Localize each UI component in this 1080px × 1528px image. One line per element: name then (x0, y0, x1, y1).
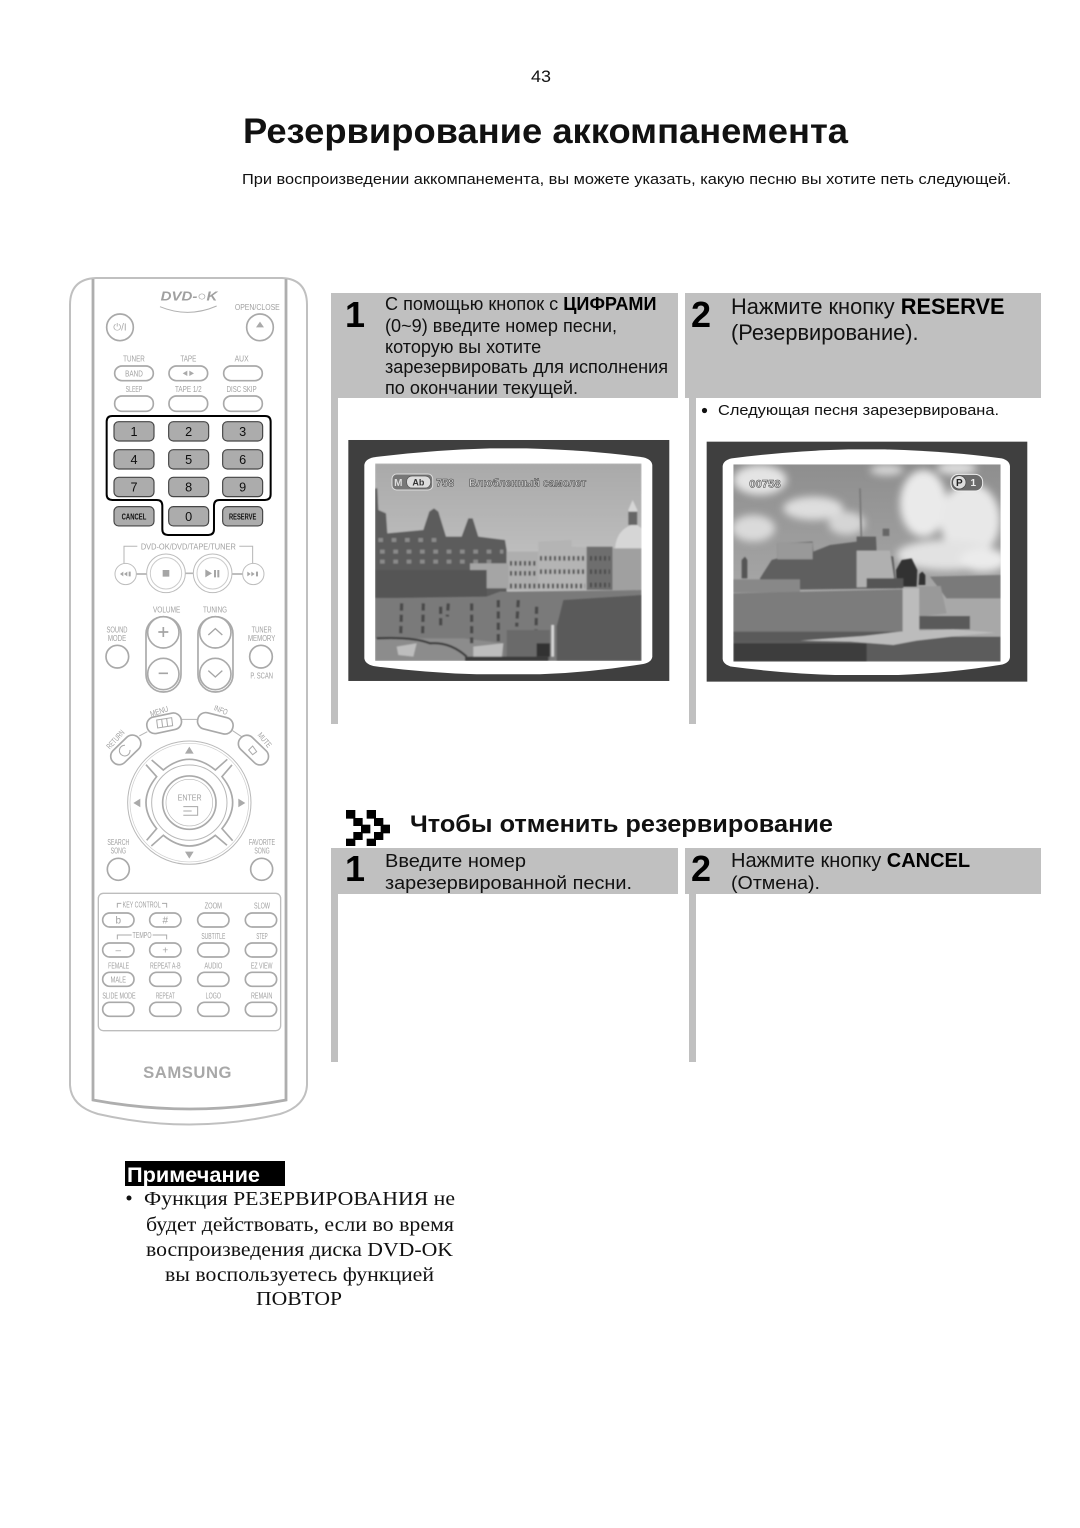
number keys highlighted: 3 (239, 425, 246, 439)
function button panel: REMAIN (251, 992, 272, 1001)
panel: step 1 (331, 293, 678, 724)
tuner memory button: TUNER (252, 626, 272, 635)
step 1 text: которую вы хотите (385, 337, 541, 357)
cancel step 2 text: Нажмите кнопку CANCEL (731, 850, 970, 872)
search song button: SONG (111, 846, 126, 855)
function button panel: SLOW (254, 902, 270, 911)
note text (126, 1188, 455, 1310)
source buttons: TAPE 1/2 (175, 385, 202, 394)
step 1 text: зарезервировать для исполнения (385, 357, 668, 377)
note block (125, 1161, 455, 1310)
number keys highlighted: 4 (130, 453, 138, 467)
on-screen display song title: Ab (412, 478, 425, 488)
open close button (235, 303, 280, 341)
samsung logo: SAMSUNG (143, 1063, 231, 1082)
cancel button: CANCEL (122, 512, 146, 521)
tuner memory button (248, 626, 276, 681)
menu cluster: INFO (213, 703, 229, 717)
function button panel: b (116, 915, 122, 926)
menu cluster: MENU (149, 704, 170, 719)
panel: step 2 (685, 293, 1041, 724)
cancel button (114, 507, 154, 526)
step 2 screen (707, 442, 1027, 682)
step 2 text: (Резервирование). (731, 320, 919, 345)
function button panel: REPEAT (156, 992, 175, 1001)
cancel step 1 number: 1 (345, 848, 365, 889)
reserve button: RESERVE (229, 512, 257, 521)
remote middle section (105, 554, 276, 880)
number keys highlighted: 8 (185, 481, 192, 495)
sound mode button (106, 626, 129, 668)
note text: ПОВТОР (256, 1288, 342, 1310)
function button panel: FEMALE (108, 962, 129, 971)
transport group label: DVD-OK/DVD/TAPE/TUNER (141, 542, 236, 551)
on-screen display counter: 00758 (749, 478, 781, 490)
note text: Функция РЕЗЕРВИРОВАНИЯ не (144, 1188, 455, 1210)
function button panel: + (162, 945, 168, 956)
number keys highlighted: 2 (185, 425, 192, 439)
function button panel: KEY CONTROL (123, 901, 161, 910)
step 2 number: 2 (691, 294, 711, 335)
source buttons (115, 354, 262, 411)
cancel step 2 number: 2 (691, 848, 711, 889)
on-screen display song title: 758 (436, 477, 454, 489)
step 2 text (731, 294, 1005, 345)
power button (107, 314, 133, 341)
source buttons: BAND (125, 369, 143, 378)
reserve button (223, 507, 263, 526)
panel: cancel step 2 (685, 848, 1041, 1062)
on-screen display counter: 1 (971, 478, 977, 489)
section heading: cancel reservation (346, 810, 833, 846)
function button panel: STEP (256, 932, 268, 941)
function button panel: ZOOM (205, 902, 222, 911)
favorite song button: SONG (254, 846, 270, 855)
page number: 43 (531, 68, 551, 86)
source buttons: SLEEP (126, 385, 142, 394)
function button panel (98, 893, 281, 1031)
function button panel: – (116, 945, 122, 956)
DVD-OK logo: DVD-○K (161, 289, 219, 304)
function button panel: # (163, 915, 169, 926)
menu cluster: RETURN (105, 728, 127, 751)
number keys highlighted: 0 (185, 510, 192, 524)
open close button: OPEN/CLOSE (235, 303, 280, 312)
menu cluster: MUTE (256, 731, 273, 749)
cancel step 1 text (385, 851, 632, 893)
function button panel: AUDIO (204, 962, 222, 971)
function button panel: MALE (111, 975, 126, 984)
step 1 text (385, 294, 668, 398)
sound mode button: SOUND (106, 626, 128, 635)
transport group label (124, 542, 253, 563)
function button panel: SLIDE MODE (102, 992, 136, 1001)
on-screen display song title (392, 474, 587, 490)
note text: будет действовать, если во время (146, 1214, 454, 1236)
step 1 text: (0~9) введите номер песни, (385, 316, 617, 336)
on-screen display counter: P (956, 478, 963, 489)
cancel step 2 background (685, 848, 1041, 1062)
highlight frame around number keys (107, 416, 271, 535)
power button: ⏻/I (113, 323, 127, 334)
page (69, 70, 1041, 1305)
function button panel: REPEAT A-B (150, 962, 181, 971)
note text: вы воспользуетесь функцией (165, 1264, 434, 1286)
title: Резервирование аккомпанемента (243, 111, 848, 151)
function button panel: LOGO (206, 992, 221, 1001)
source buttons: TUNER (123, 354, 145, 363)
cancel step 1 background (331, 848, 678, 1062)
remote upper section (107, 289, 280, 563)
step 1 background (331, 293, 678, 724)
step 1 number: 1 (345, 294, 365, 335)
cancel step 1 text: Введите номер (385, 851, 526, 871)
number keys highlighted: 7 (130, 481, 138, 495)
panel: cancel step 1 (331, 848, 678, 1062)
number keys highlighted: 1 (130, 425, 138, 439)
function button panel: SUBTITLE (201, 932, 225, 941)
on-screen display counter (749, 474, 983, 491)
intro text: При воспроизведении аккомпанемента, вы можете указать, какую песню вы хотите петь следующей. (242, 172, 1011, 188)
number keys highlighted (114, 422, 263, 526)
menu cluster (105, 703, 273, 768)
enter label: ENTER (178, 793, 202, 803)
photo: harbour skyline (375, 463, 642, 661)
search song button: SEARCH (107, 838, 129, 847)
source buttons: DISC SKIP (227, 385, 257, 394)
cancel step 1 text: зарезервированной песни. (385, 873, 632, 893)
step 2 note: Следующая песня зарезервирована. (718, 403, 999, 419)
volume control (146, 605, 181, 692)
number keys highlighted: 6 (239, 453, 246, 467)
number keys highlighted: 9 (239, 481, 246, 495)
source buttons: AUX (235, 354, 249, 363)
transport buttons (115, 554, 264, 593)
favorite song button: FAVORITE (249, 838, 275, 847)
function button panel: TEMPO (132, 931, 151, 940)
sound mode button: MODE (108, 634, 126, 643)
tuner memory button: P. SCAN (250, 672, 273, 681)
function button panel: EZ VIEW (251, 962, 273, 971)
icon: double chevron (346, 810, 390, 846)
cancel step 2 text (731, 850, 970, 893)
on-screen display song title: M (394, 478, 402, 489)
search song button (107, 838, 129, 880)
number keys highlighted: 5 (185, 453, 192, 467)
favorite song button (249, 838, 275, 880)
note heading: Примечание (127, 1164, 260, 1187)
heading text: Чтобы отменить резервирование (410, 812, 833, 838)
cancel step 2 text: (Отмена). (731, 873, 820, 893)
note text: воспроизведения диска DVD-OK (146, 1239, 454, 1261)
volume control: VOLUME (153, 605, 180, 614)
on-screen display song title: Влюбленный самолет (469, 477, 587, 489)
tuning control (198, 605, 233, 692)
step 2 text: Нажмите кнопку RESERVE (731, 294, 1005, 319)
photo: fortress and sea (732, 462, 1007, 662)
step 1 text: по окончании текущей. (385, 378, 578, 398)
source buttons: TAPE (180, 354, 196, 363)
tuner memory button: MEMORY (248, 634, 276, 643)
screen frame (707, 442, 1027, 682)
step 1 text: С помощью кнопок с ЦИФРАМИ (385, 294, 657, 314)
screen frame (348, 440, 669, 681)
remote lower section (98, 893, 281, 1082)
step 2 background (685, 293, 1041, 724)
tuning control: TUNING (203, 605, 227, 614)
navigation pad (128, 741, 251, 864)
remote control illustration (70, 278, 307, 1124)
DVD-OK logo (160, 289, 219, 312)
remote body outline (70, 278, 307, 1124)
step 1 screen (348, 440, 669, 681)
